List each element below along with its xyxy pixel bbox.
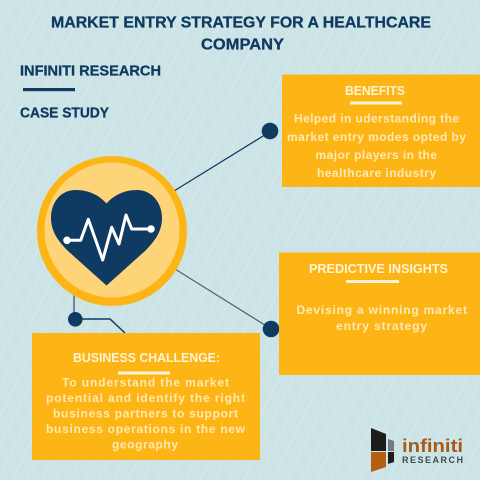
benefits text: Helped in uderstanding the xyxy=(294,112,459,126)
heading: Case Study: CASE STUDY xyxy=(20,104,109,122)
title: MARKET ENTRY STRATEGY FOR A HEALTHCARE xyxy=(51,14,431,32)
connector: heart to benefits xyxy=(174,123,278,191)
connector: heart to business challenge xyxy=(68,295,125,333)
benefits text: major players in the xyxy=(316,148,437,162)
logo: Infiniti Research: infiniti xyxy=(402,436,463,456)
heading: Infiniti Research: INFINITI RESEARCH xyxy=(20,62,161,80)
title: COMPANY xyxy=(201,36,285,54)
business challenge text: geography xyxy=(112,438,178,452)
predictive insights text xyxy=(296,303,467,333)
benefits text: market entry modes opted by xyxy=(287,130,466,144)
benefits heading: BENEFITS xyxy=(345,83,405,98)
business challenge text: potential and identify the right xyxy=(46,391,245,405)
predictive insights divider xyxy=(346,280,399,283)
business challenge divider xyxy=(118,372,170,374)
panel: business challenge xyxy=(32,333,260,460)
predictive insights text: entry strategy xyxy=(336,319,427,333)
logo: Infiniti Research: RESEARCH xyxy=(402,455,463,465)
heading divider xyxy=(23,88,75,91)
title xyxy=(51,14,431,54)
business challenge text: To understand the market xyxy=(62,376,229,390)
benefits text xyxy=(287,112,466,180)
predictive insights text: Devising a winning market xyxy=(296,303,467,317)
benefits divider xyxy=(350,102,402,104)
business challenge text: business operations in the new xyxy=(46,422,246,436)
predictive insights heading: PREDICTIVE INSIGHTS xyxy=(309,261,448,276)
business challenge text xyxy=(46,376,246,452)
business challenge heading: BUSINESS CHALLENGE: xyxy=(73,350,220,365)
icon: heart with pulse in circle xyxy=(37,156,187,306)
benefits text: healthcare industry xyxy=(317,166,436,180)
panel: predictive insights xyxy=(279,252,480,375)
logo: Infiniti Research xyxy=(371,428,463,472)
panel: benefits xyxy=(282,74,480,187)
business challenge text: business partners to support xyxy=(53,406,238,420)
connector: heart to predictive insights xyxy=(175,269,279,337)
